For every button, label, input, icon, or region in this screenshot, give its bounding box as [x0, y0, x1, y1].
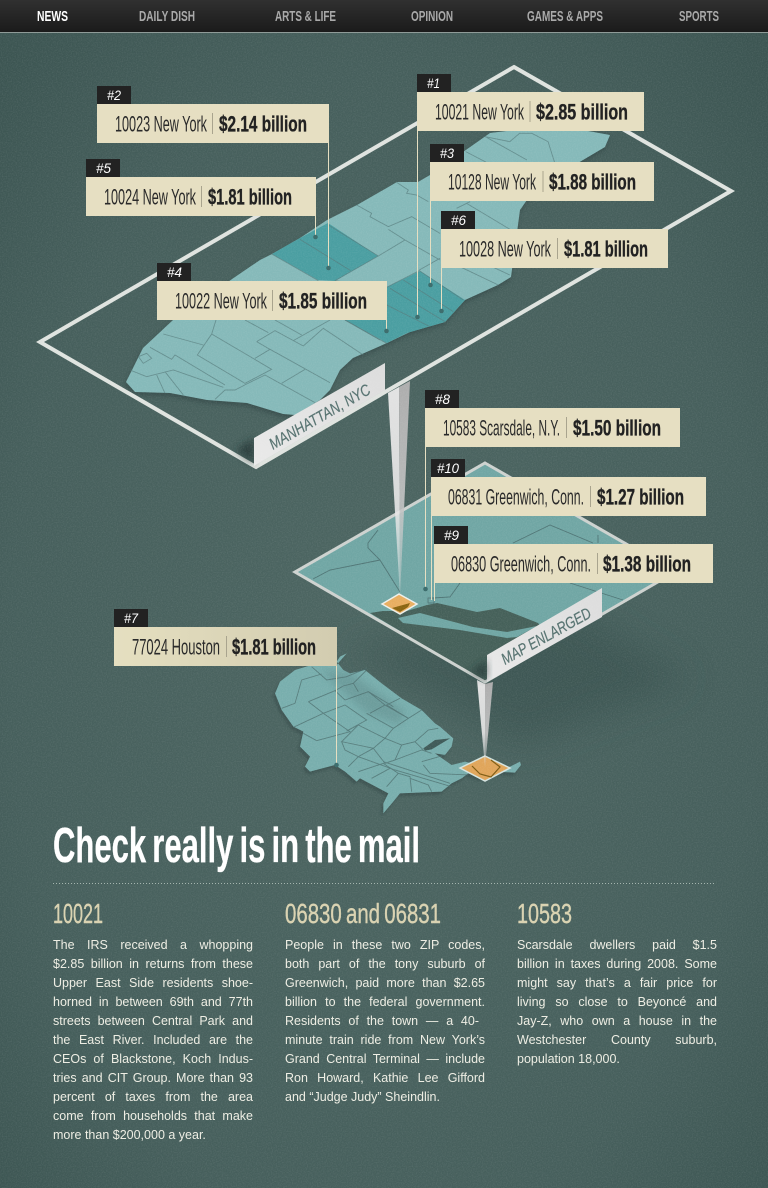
callout #5: 10024 New York: 10024 New York	[104, 184, 197, 210]
enlarged map land	[295, 463, 675, 682]
ZIP code boundaries: lower Manhattan	[130, 320, 387, 403]
text block: 10583	[517, 938, 717, 1066]
callout #4: 10022 New York: $1.85 billion	[279, 288, 367, 314]
text block: 10021: tries and CIT Group. More than 93	[53, 1071, 253, 1085]
Manhattan land	[126, 127, 610, 415]
text block: 06830 and 06831: Grand Central Terminal — include	[285, 1052, 485, 1066]
callout #5: 10024 New York: #5	[96, 160, 111, 176]
callout #3: 10128 New York	[428, 144, 654, 287]
navigation bar: NEWS	[37, 8, 68, 25]
text block: 06830 and 06831: Greenwich, paid more than $2.65	[285, 976, 485, 990]
Manhattan land shadow	[125, 130, 609, 418]
text block: 10021: horned in between 69th and 77th	[53, 995, 253, 1009]
callout #7: 77024 Houston: #7	[124, 610, 139, 626]
callout #5: 10024 New York	[86, 159, 318, 239]
navigation bar: ARTS & LIFE	[275, 8, 336, 25]
navigation bar: OPINION	[411, 8, 453, 25]
map pin marker: New York area	[460, 756, 510, 781]
state boundaries	[282, 667, 468, 792]
callout #9: 06830 Greenwich, Conn.: $1.38 billion	[603, 552, 691, 576]
callout #4: 10022 New York	[157, 263, 389, 333]
text block: 10583: population 18,000.	[517, 1052, 620, 1066]
callout #8: 10583 Scarsdale, N.Y.: 10583 Scarsdale, N.Y.	[443, 416, 560, 440]
text block: 10583: Scarsdale dwellers paid $1.5	[517, 938, 717, 952]
shadow of enlarged map on US land	[320, 670, 405, 725]
Long Island	[398, 613, 537, 638]
callout #8: 10583 Scarsdale, N.Y.: $1.50 billion	[573, 416, 661, 440]
navigation bar	[0, 0, 768, 33]
callout #7: 77024 Houston: $1.81 billion	[232, 634, 316, 660]
map: enlarged New York area	[295, 463, 675, 682]
callout #4: 10022 New York: 10022 New York	[175, 288, 268, 314]
highlighted ZIP codes 10023 and 10024	[272, 223, 378, 281]
title: Check really is in the mail	[53, 819, 420, 873]
callout #8: 10583 Scarsdale, N.Y.: #8	[435, 391, 450, 407]
water: Long Island Sound	[370, 603, 552, 682]
text block: 06830 and 06831: both part of the tony suburb of	[285, 957, 485, 971]
Manhattan frame	[40, 67, 731, 467]
county lines	[313, 525, 623, 603]
text block: 10583: billion in taxes during 2008. Some	[517, 957, 717, 971]
shadow beneath enlarged map	[340, 600, 690, 745]
callout #3: 10128 New York: #3	[440, 145, 454, 161]
sign: Manhattan, NYC: MANHATTAN, NYC	[266, 382, 374, 453]
sign: map enlarged	[487, 588, 602, 682]
callout #10: 06831 Greenwich, Conn.: #10	[437, 460, 459, 476]
text block: 06830 and 06831: billion to the federal government.	[285, 995, 485, 1009]
callout #3: 10128 New York: 10128 New York	[448, 170, 537, 194]
text block: 06830 and 06831: minute train ride from New York’s	[285, 1033, 485, 1047]
navigation bar: GAMES & APPS	[527, 8, 603, 25]
text block: 10583: Westchester County suburb,	[517, 1033, 717, 1047]
text block: 10021: $2.85 billion in returns from these	[53, 957, 253, 971]
text block: 10583: living so close to Beyoncé and	[517, 995, 717, 1009]
text block: 10021: CEOs of Blackstone, Koch Indus-	[53, 1052, 253, 1066]
pointer from enlarged map	[477, 680, 493, 767]
callout #7: 77024 Houston	[114, 609, 339, 767]
callout #6: 10028 New York: $1.81 billion	[564, 236, 648, 262]
callout #2: 10023 New York: $2.14 billion	[219, 112, 307, 136]
callout #6: 10028 New York: #6	[451, 212, 466, 228]
callout #6: 10028 New York	[439, 211, 668, 313]
callout #1: 10021 New York	[415, 74, 644, 319]
sign: map enlarged: MAP ENLARGED	[499, 605, 595, 668]
callout #1: 10021 New York: 10021 New York	[435, 100, 525, 124]
ZIP code boundaries: upper Manhattan	[466, 133, 555, 275]
callout #2: 10023 New York: #2	[107, 87, 121, 103]
callout #6: 10028 New York: 10028 New York	[459, 236, 552, 262]
text block: 06830 and 06831	[285, 938, 485, 1104]
shadow at sign corner	[470, 660, 487, 680]
column heading: 10583: 10583	[517, 898, 572, 929]
text block: 10021: the East River. Included are the	[53, 1033, 253, 1047]
callout #9: 06830 Greenwich, Conn.: 06830 Greenwich, Conn.	[451, 552, 591, 576]
text block: 10021: more than $200,000 a year.	[53, 1128, 206, 1142]
callout #9: 06830 Greenwich, Conn.	[434, 526, 713, 601]
callout #1: 10021 New York: $2.85 billion	[536, 100, 628, 124]
highlighted ZIP codes on the Upper East Side	[345, 271, 465, 343]
callout #5: 10024 New York: $1.81 billion	[208, 184, 292, 210]
callout #7: 77024 Houston: 77024 Houston	[132, 634, 220, 660]
text block: 10021	[53, 938, 253, 1142]
callout #10: 06831 Greenwich, Conn.	[431, 459, 706, 600]
US land shadow	[273, 656, 519, 816]
callout #4: 10022 New York: #4	[167, 264, 182, 280]
text block: 06830 and 06831: and “Judge Judy” Sheindlin.	[285, 1090, 440, 1104]
callout #1: 10021 New York: #1	[427, 75, 440, 91]
text block: 10021: come from households that make	[53, 1109, 253, 1123]
map: Manhattan, NYC	[40, 67, 731, 467]
text block: 10583: Jay-Z, who own a house in the	[517, 1014, 717, 1028]
map: United States	[273, 653, 521, 816]
pointer from Manhattan map	[388, 381, 410, 597]
navigation bar: SPORTS	[679, 8, 719, 25]
text block: 06830 and 06831: People in these two ZIP codes,	[285, 938, 485, 952]
callout #2: 10023 New York: 10023 New York	[115, 112, 208, 136]
column heading: 06830 and 06831: 06830 and 06831	[285, 898, 441, 929]
column heading: 10021: 10021	[53, 898, 103, 929]
navigation bar: DAILY DISH	[139, 8, 195, 25]
Great Lakes	[423, 738, 450, 751]
enlarged map frame	[295, 463, 675, 682]
text block: 10583: might say that’s a fair price for	[517, 976, 717, 990]
callout #2: 10023 New York	[97, 86, 331, 270]
US land	[275, 653, 521, 813]
callout #10: 06831 Greenwich, Conn.: 06831 Greenwich, Conn.	[448, 484, 584, 510]
text block: 10021: streets between Central Park and	[53, 1014, 253, 1028]
map pin marker: enlarged area	[382, 594, 417, 614]
callout #10: 06831 Greenwich, Conn.: $1.27 billion	[597, 484, 684, 510]
callout #9: 06830 Greenwich, Conn.: #9	[444, 527, 459, 543]
callout #3: 10128 New York: $1.88 billion	[549, 170, 636, 194]
text block: 10021: Upper East Side residents shoe-	[53, 976, 253, 990]
text block: 10021: The IRS received a whopping	[53, 938, 253, 952]
text block: 06830 and 06831: Residents of the town — a 40-	[285, 1014, 479, 1028]
shadow at Manhattan sign corner	[236, 438, 254, 464]
ZIP code boundaries: midtown	[272, 182, 517, 340]
text block: 06830 and 06831: Ron Howard, Kathie Lee Gifford	[285, 1071, 485, 1085]
sign: Manhattan, NYC	[254, 363, 385, 466]
text block: 10021: percent of taxes from the area	[53, 1090, 253, 1104]
callout #8: 10583 Scarsdale, N.Y.	[423, 390, 680, 591]
